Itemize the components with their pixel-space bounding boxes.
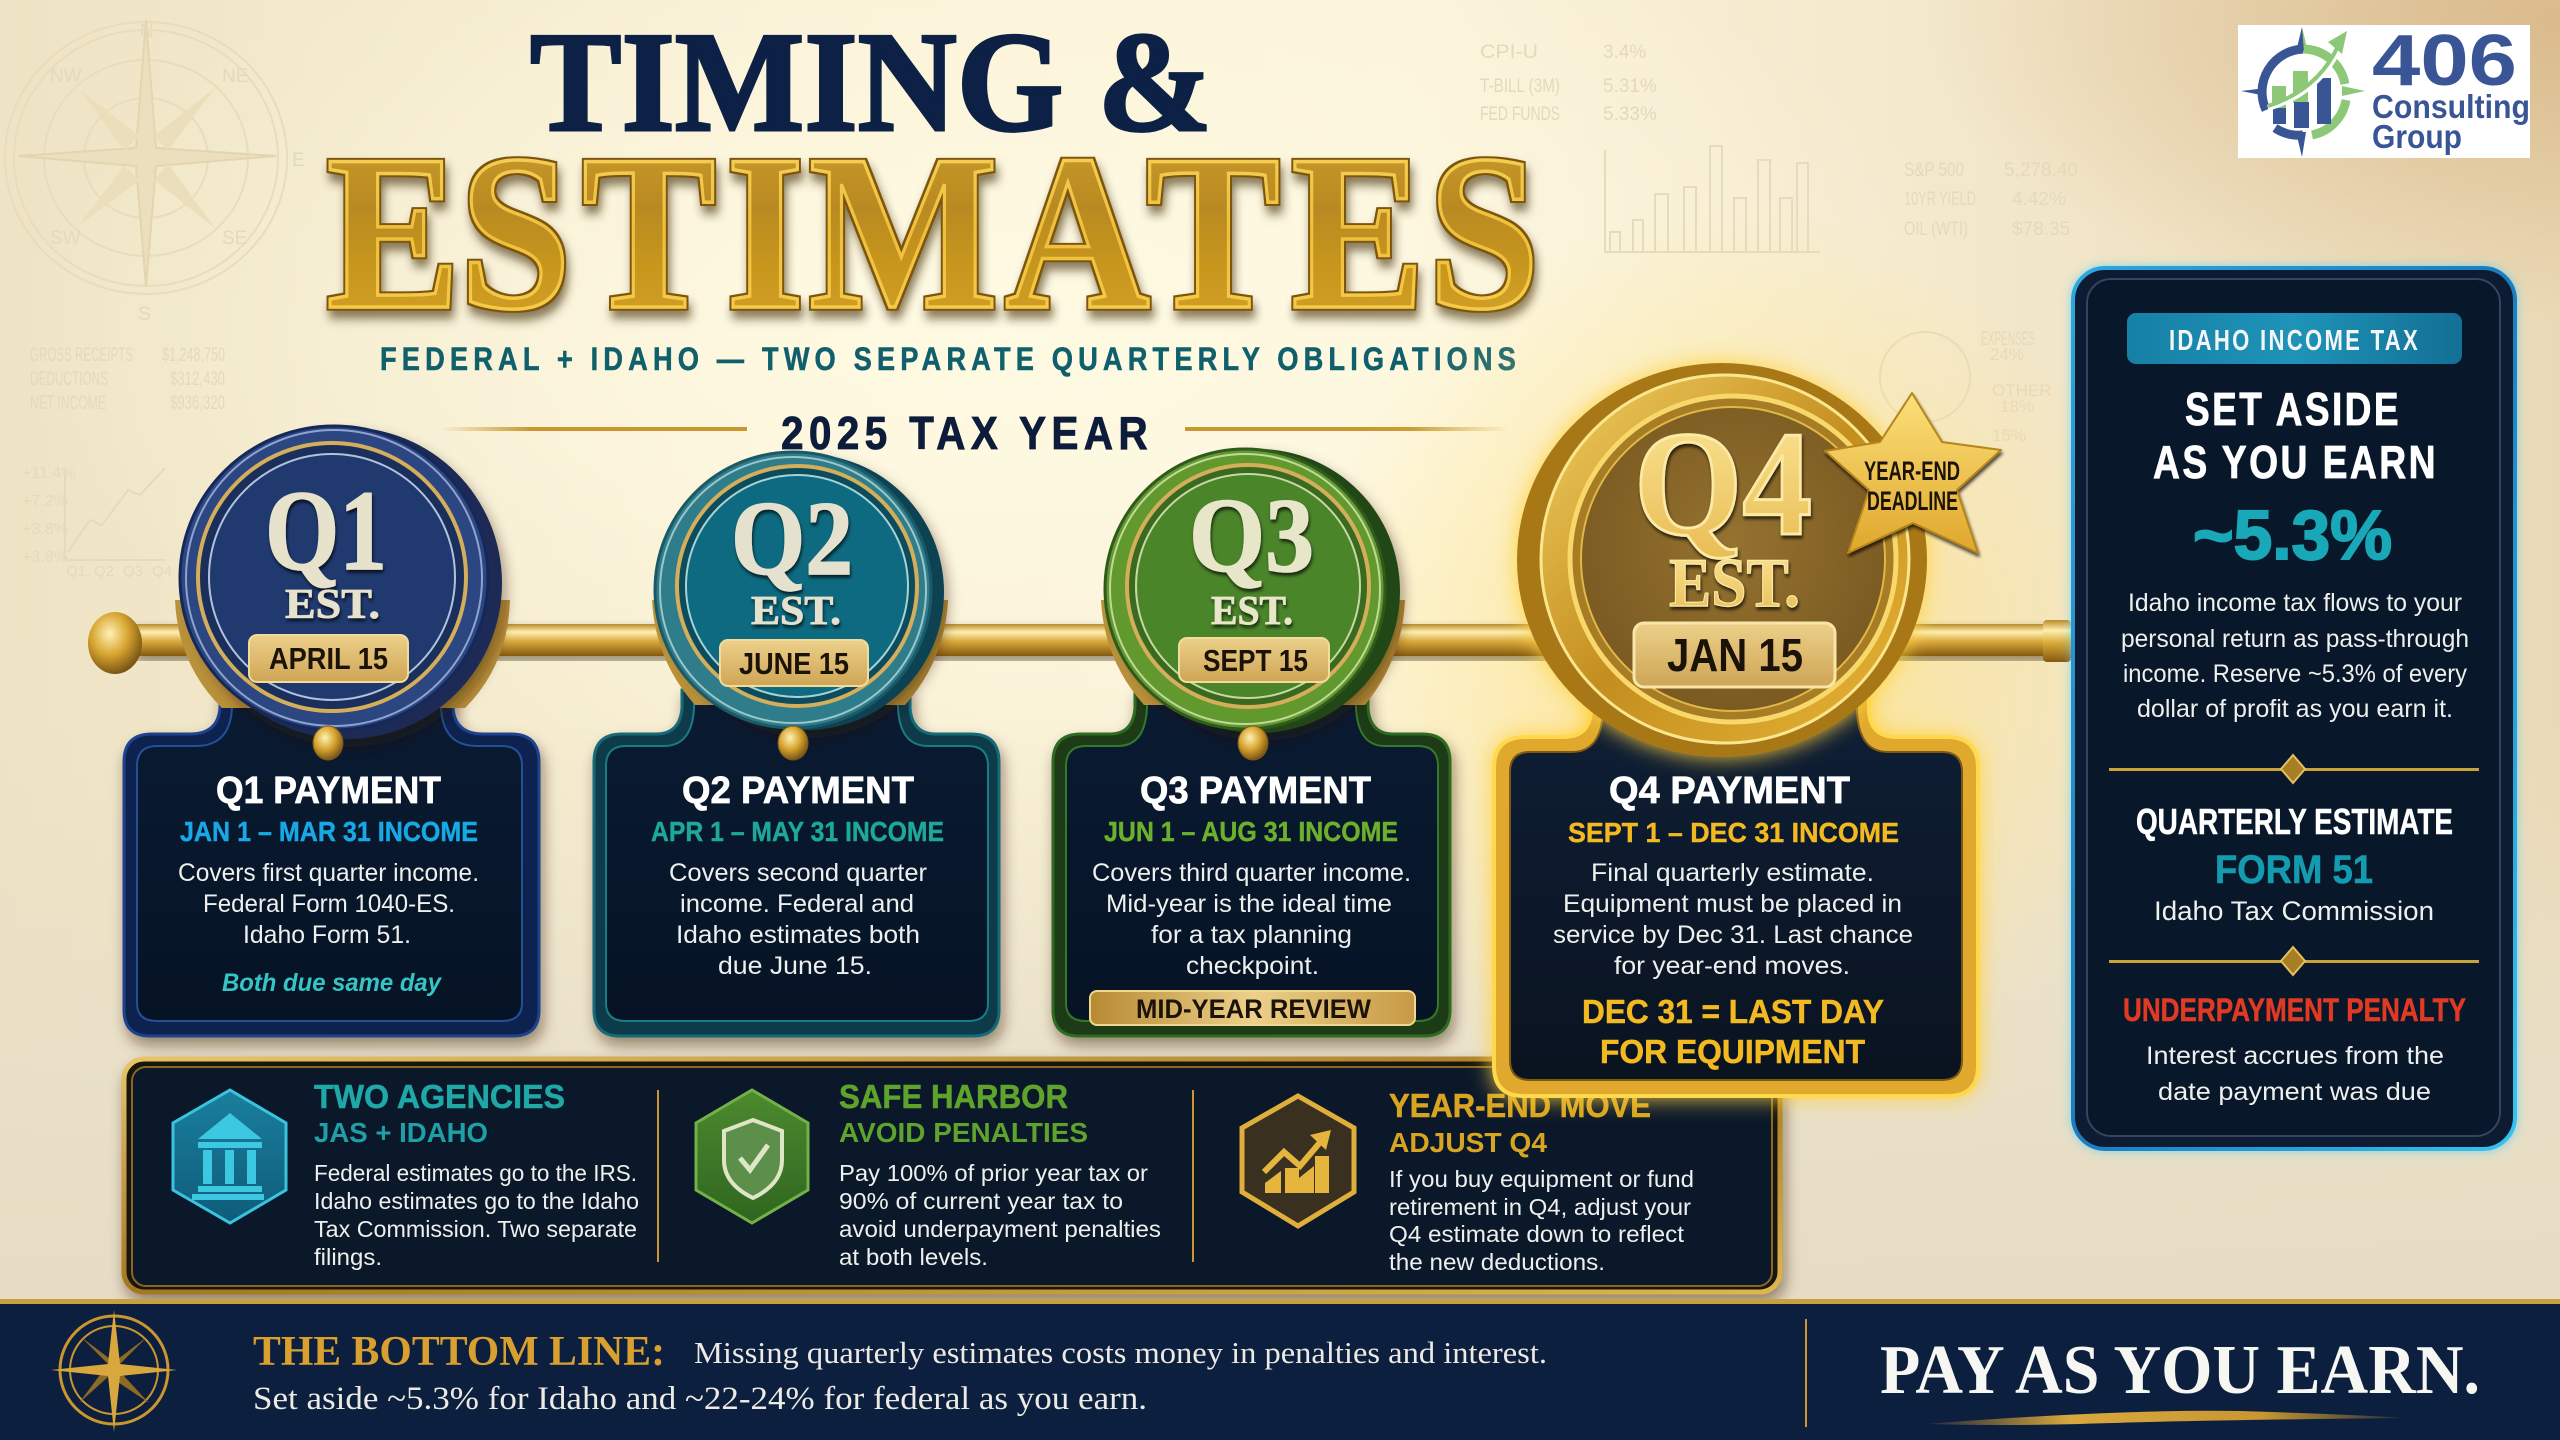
watermark: finance figures and charts: Q4: [152, 563, 172, 580]
watermark: finance figures and charts: +3.8%: [22, 549, 68, 566]
heading: year-end move: YEAR-END MOVE: [1389, 1087, 1651, 1124]
footer banner: [0, 1299, 2560, 1440]
heading: set aside as you earn: AS YOU EARN: [2153, 436, 2438, 488]
watermark: compass rose: E: [292, 150, 305, 171]
watermark: compass rose: SW: [50, 228, 81, 249]
badge: year-end deadline star: DEADLINE: [1867, 486, 1958, 516]
panel: Q2 payment card: [594, 690, 999, 1036]
heading: safe harbor: SAFE HARBOR: [839, 1078, 1068, 1115]
watermark: compass rose: S: [138, 304, 151, 325]
watermark: finance figures and charts: $936,320: [170, 393, 225, 414]
watermark: finance figures and charts: +7.2%: [22, 493, 68, 510]
label: the bottom line: THE BOTTOM LINE:: [253, 1329, 665, 1375]
text: missing estimates: Missing quarterly estimates costs money in penalties and interest.: [694, 1335, 1547, 1370]
card heading: Q1 PAYMENT: [216, 770, 441, 812]
icon: gold pins on cards: [313, 726, 1268, 760]
body: year-end move: Q4 estimate down to reflect: [1389, 1221, 1685, 1247]
Q4 ambient glow: [1300, 210, 2160, 1110]
heading: 2025 tax year: 2025 TAX YEAR: [781, 407, 1153, 459]
card body: Federal Form 1040-ES.: [203, 890, 455, 918]
watermark: finance figures and charts: EXPENSES: [1981, 329, 2035, 350]
watermark: finance figures and charts: S&P 500: [1904, 160, 1964, 181]
Idaho Tax Commission: Idaho Tax Commission: [2154, 896, 2434, 926]
card heading: Q2 PAYMENT: [682, 770, 914, 812]
card body: [669, 859, 927, 980]
date: June 15: JUNE 15: [739, 646, 849, 681]
medallion: Q4: [1517, 363, 2001, 757]
card heading: Q3 PAYMENT: [1140, 770, 1371, 812]
title: Estimates in gold: ESTIMATES: [327, 109, 1539, 355]
stat: 5.3 percent: ~5.3%: [2193, 496, 2392, 574]
body: interest accrues: [2146, 1042, 2444, 1106]
card body: Mid-year is the ideal time: [1106, 890, 1392, 918]
card body: Idaho Form 51.: [243, 921, 411, 949]
date: Jan 15: JAN 15: [1667, 629, 1803, 681]
watermark: finance figures and charts: OIL (WTI): [1904, 219, 1968, 240]
body: two agencies: Idaho estimates go to the Idaho: [314, 1188, 639, 1214]
callout: Dec 31 last day: DEC 31 = LAST DAY: [1582, 993, 1884, 1030]
watermark: finance figures and charts: 5,278.40: [2004, 160, 2078, 181]
income period: SEPT 1 – DEC 31 INCOME: [1568, 817, 1899, 848]
watermark: compass rose: [5, 20, 305, 325]
badge: mid-year review: [1090, 991, 1415, 1025]
card body: [178, 859, 479, 949]
body: year-end move: retirement in Q4, adjust your: [1389, 1194, 1691, 1220]
body: safe harbor: at both levels.: [839, 1244, 988, 1270]
card body: Idaho estimates both: [676, 921, 920, 949]
heading: two agencies: TWO AGENCIES: [314, 1078, 565, 1115]
watermark: finance figures and charts: NET INCOME: [30, 393, 106, 414]
medallion: Q4: EST.: [1669, 545, 1800, 622]
watermark: compass rose: NW: [50, 66, 82, 87]
icon: growth chart hexagon: [1242, 1096, 1354, 1226]
watermark: finance figures and charts: +3.8%: [22, 521, 68, 538]
watermark: finance figures and charts: GROSS RECEIPTS: [30, 345, 133, 366]
body: year-end move: the new deductions.: [1389, 1249, 1605, 1275]
body: year-end move: [1389, 1166, 1694, 1275]
body: pass-through explanation: personal return as pass-through: [2121, 625, 2469, 653]
income period: APR 1 – MAY 31 INCOME: [651, 816, 944, 847]
watermark: finance figures and charts: $312,430: [170, 369, 225, 390]
body: pass-through explanation: income. Reserve ~5.3% of every: [2123, 660, 2467, 688]
medallion: Q2: EST.: [751, 587, 841, 633]
logo: 406 Consulting Group: [2238, 21, 2530, 158]
callout: Dec 31 last day: [1582, 993, 1884, 1070]
medallion: Q3: Q3: [1189, 477, 1314, 594]
watermark: finance figures and charts: Q2: [94, 563, 114, 580]
subheading: adjust Q4: ADJUST Q4: [1389, 1127, 1547, 1158]
medallion: Q1: EST.: [285, 582, 380, 628]
body: pass-through explanation: Idaho income tax flows to your: [2128, 589, 2462, 617]
pill: Idaho income tax: [2127, 313, 2462, 364]
card body: for a tax planning: [1151, 921, 1352, 949]
body: interest accrues: date payment was due: [2158, 1078, 2431, 1106]
body: pass-through explanation: [2121, 589, 2469, 723]
card body: Covers third quarter income.: [1092, 859, 1411, 887]
date: Sept 15: SEPT 15: [1203, 643, 1308, 678]
text: set aside line: Set aside ~5.3% for Idaho and ~22-24% for federal as you earn.: [253, 1381, 1147, 1417]
heading: set aside as you earn: SET ASIDE: [2185, 383, 2401, 435]
logo: 406 Consulting Group: 406: [2372, 21, 2517, 101]
medallion: Q1: [175, 426, 510, 739]
body: year-end move: If you buy equipment or fund: [1389, 1166, 1694, 1192]
watermark: finance figures and charts: T-BILL (3M): [1480, 76, 1560, 97]
body: two agencies: filings.: [314, 1244, 382, 1270]
card body: service by Dec 31. Last chance: [1553, 921, 1913, 949]
date: April 15: [249, 635, 408, 682]
heading: underpayment penalty: UNDERPAYMENT PENALTY: [2123, 992, 2466, 1028]
watermark: finance figures and charts: FED FUNDS: [1480, 104, 1560, 125]
watermark: finance figures and charts: 4.42%: [2012, 189, 2066, 210]
watermark: finance figures and charts: 18%: [2000, 397, 2034, 416]
date: June 15: [720, 640, 868, 686]
medallion: Q2: Q2: [731, 480, 853, 597]
badge: year-end deadline star: [1825, 393, 2001, 553]
subtitle: FEDERAL + IDAHO — TWO SEPARATE QUARTERLY OBLIGATIONS: [380, 341, 1521, 377]
card body: Covers second quarter: [669, 859, 927, 887]
panel: Idaho income tax: [2073, 268, 2515, 1149]
body: interest accrues: Interest accrues from the: [2146, 1042, 2444, 1070]
badge: mid-year review: MID-YEAR REVIEW: [1136, 994, 1371, 1024]
watermark: compass rose: SE: [222, 228, 247, 249]
subheading: JAS + Idaho: JAS + IDAHO: [314, 1117, 488, 1148]
date: April 15: APRIL 15: [269, 641, 388, 676]
callout: Dec 31 last day: FOR EQUIPMENT: [1600, 1033, 1865, 1070]
watermark: compass rose: NE: [222, 66, 248, 87]
subheading: avoid penalties: AVOID PENALTIES: [839, 1117, 1088, 1148]
heading: 2025 tax year: [440, 407, 1510, 459]
watermark: finance figures and charts: 24%: [1990, 345, 2024, 364]
watermark: finance figures and charts: +11.4%: [22, 465, 76, 482]
medallion: Q3: [1101, 449, 1405, 733]
watermark: finance figures and charts: 5.33%: [1603, 104, 1657, 125]
watermark: finance figures and charts: DEDUCTIONS: [30, 369, 108, 390]
icon: gold compass: [51, 1310, 177, 1432]
date: Jan 15: [1634, 623, 1835, 687]
medallion: Q2: [652, 452, 948, 730]
card heading: Q4 PAYMENT: [1609, 770, 1850, 812]
card body: for year-end moves.: [1614, 952, 1850, 980]
panel: Q1 payment card: [124, 690, 539, 1036]
card body: Equipment must be placed in: [1563, 890, 1902, 918]
watermark: finance figures and charts: OTHER: [1992, 381, 2052, 400]
body: two agencies: [314, 1160, 639, 1270]
watermark: finance figures and charts: $78.35: [2012, 219, 2070, 240]
body: two agencies: Tax Commission. Two separate: [314, 1216, 637, 1242]
body: safe harbor: 90% of current year tax to: [839, 1188, 1123, 1214]
watermark: finance figures and charts: 3.4%: [1603, 42, 1646, 63]
body: safe harbor: avoid underpayment penalties: [839, 1216, 1161, 1242]
watermark: finance figures and charts: [22, 42, 2078, 580]
timeline rail: [88, 612, 2071, 674]
icon: shield hexagon: [696, 1090, 808, 1223]
card body: Covers first quarter income.: [178, 859, 479, 887]
icon: bank hexagon: [173, 1090, 286, 1223]
medallion: Q3: EST.: [1211, 587, 1293, 633]
card body: due June 15.: [718, 952, 872, 980]
pill: Idaho income tax: IDAHO INCOME TAX: [2169, 325, 2420, 357]
logo: 406 Consulting Group: Group: [2372, 118, 2462, 155]
gold brush underline: [1925, 1411, 2407, 1425]
medallion: Q1: Q1: [265, 467, 387, 594]
watermark: finance figures and charts: 10YR YIELD: [1904, 189, 1976, 210]
heading: quarterly estimate: QUARTERLY ESTIMATE: [2136, 801, 2453, 842]
watermark: finance figures and charts: CPI-U: [1480, 42, 1538, 63]
body: safe harbor: [839, 1160, 1161, 1270]
watermark: finance figures and charts: $1,248,750: [162, 345, 225, 366]
card body: income. Federal and: [680, 890, 914, 918]
body: pass-through explanation: dollar of profit as you earn it.: [2137, 695, 2453, 723]
heading: set aside as you earn: [2153, 383, 2438, 488]
body: safe harbor: Pay 100% of prior year tax or: [839, 1160, 1148, 1186]
watermark: finance figures and charts: 15%: [1992, 426, 2026, 445]
badge: year-end deadline star: YEAR-END: [1864, 456, 1960, 486]
income period: JAN 1 – MAR 31 INCOME: [180, 816, 478, 847]
body: two agencies: Federal estimates go to the IRS.: [314, 1160, 637, 1186]
card body: checkpoint.: [1186, 952, 1319, 980]
slogan: pay as you earn: PAY AS YOU EARN.: [1880, 1332, 2480, 1409]
panel: Q3 payment card: [1053, 690, 1450, 1036]
watermark: compass rose: N: [140, 21, 154, 42]
watermark: finance figures and charts: 5.31%: [1603, 76, 1657, 97]
card body: [1553, 859, 1913, 980]
logo: 406 Consulting Group: Consulting: [2372, 88, 2530, 125]
watermark: finance figures and charts: Q1: [66, 563, 86, 580]
panel: supporting strip: [124, 1059, 1780, 1292]
panel: Q4 payment card: [1494, 690, 1978, 1096]
card body: Final quarterly estimate.: [1591, 859, 1874, 887]
medallion: Q4: Q4: [1634, 401, 1812, 567]
income period: JUN 1 – AUG 31 INCOME: [1104, 816, 1398, 847]
date: Sept 15: [1179, 638, 1329, 682]
watermark: finance figures and charts: Q3: [123, 563, 143, 580]
form 51: FORM 51: [2215, 848, 2373, 892]
title: Timing &: TIMING &: [530, 3, 1212, 161]
card body: [1092, 859, 1411, 980]
note: both due same day: Both due same day: [222, 969, 442, 997]
